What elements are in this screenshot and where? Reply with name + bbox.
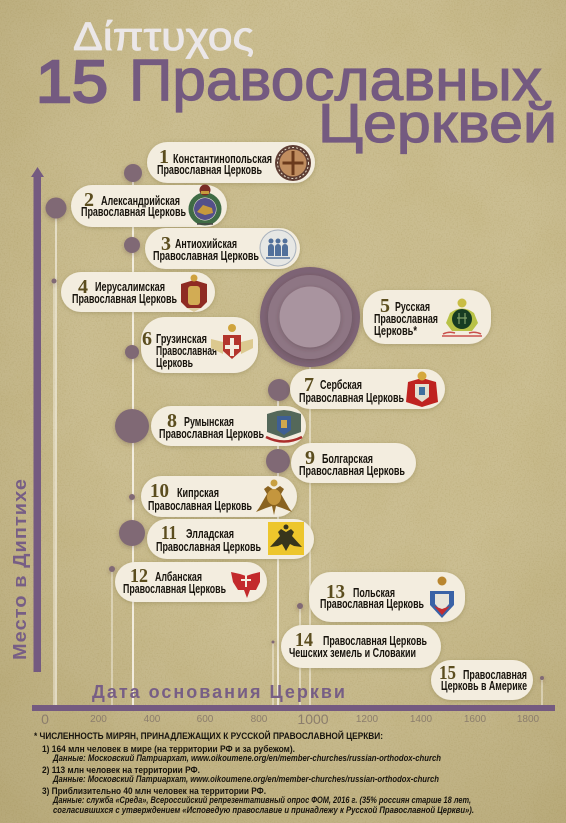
pill 14: Czech lands and Slovakia: 14 <box>295 629 313 651</box>
icon: Constantinople seal <box>275 145 311 181</box>
pill 12: Albania: 12 <box>130 565 148 587</box>
horizontal axis label: Дата основания Церкви <box>92 682 347 702</box>
icon: Georgian emblem <box>211 324 253 359</box>
timeline stems <box>54 173 542 705</box>
bubbles: church size markers <box>46 164 544 680</box>
pill 13: Poland: Польская <box>353 586 395 600</box>
pill 1: Constantinople <box>147 142 315 183</box>
pill 9: Bulgaria <box>291 443 416 483</box>
pill 4: Jerusalem: Православная Церковь <box>72 292 177 306</box>
pill 1: Constantinople: Православная Церковь <box>157 163 262 177</box>
icon: Jerusalem emblem <box>181 274 207 312</box>
icon: Romanian emblem <box>266 410 302 442</box>
axis year labels <box>41 711 540 727</box>
pill 6: Georgia: 6 <box>142 328 152 350</box>
icon: Polish emblem <box>430 576 454 618</box>
footnote: 3) Приблизительно 40 млн человек на территории РФ. <box>42 786 266 797</box>
pill 6: Georgia <box>141 317 258 373</box>
pill 6: Georgia: Православная <box>156 344 217 358</box>
footnote: Данные: Московский Патриархат, www.oikoumene.org/en/member-churches/russian-orthodox-church <box>52 753 441 764</box>
horizontal axis bar <box>32 705 555 711</box>
pill 11: Greece: 11 <box>161 522 177 544</box>
pill 3: Antioch <box>145 228 300 269</box>
icon: Russian emblem <box>442 298 482 336</box>
pill 7: Serbia: Сербская <box>320 378 362 392</box>
title <box>36 15 557 154</box>
pill 2: Alexandria: Православная Церковь <box>81 205 186 219</box>
pill 12: Albania: Албанская <box>155 570 202 584</box>
pill 11: Greece: Православная Церковь <box>156 540 261 554</box>
pill 5: Russia: 5 <box>380 295 390 317</box>
pill 5: Russia <box>363 290 491 344</box>
vertical axis label: Место в Диптихе <box>10 478 30 660</box>
axis year labels: 1800 <box>517 714 540 725</box>
axis year labels: 1000 <box>297 711 329 727</box>
pill 14: Czech lands and Slovakia: Чешских земель и Словакии <box>289 646 416 660</box>
pill 8: Romania: 8 <box>167 410 177 432</box>
pill 1: Constantinople: 1 <box>159 146 169 168</box>
pill 2: Alexandria: 2 <box>84 189 94 211</box>
axis year labels: 1200 <box>356 714 379 725</box>
icon: Greek yellow flag with eagle <box>268 522 304 555</box>
pill 13: Poland <box>309 572 465 622</box>
pill 1: Constantinople: Константинопольская <box>173 152 272 166</box>
pill 12: Albania <box>115 562 267 602</box>
title: line one: Православных <box>129 48 542 113</box>
pill 15: America <box>431 660 533 700</box>
icon: Antioch seal <box>260 230 296 266</box>
pill 8: Romania <box>151 406 306 446</box>
axis year labels: 1400 <box>410 714 433 725</box>
pill 15: America: 15 <box>439 662 456 684</box>
pill 2: Alexandria <box>71 184 227 227</box>
pill 15: America: Православная <box>463 668 527 682</box>
footnote: Данные: Московский Патриархат, www.oikoumene.org/en/member-churches/russian-orthodox-church <box>52 774 439 785</box>
pill 6: Georgia: Грузинская <box>156 332 207 346</box>
pill 11: Greece: Элладская <box>186 527 234 541</box>
pill 8: Romania: Румынская <box>184 415 234 429</box>
icon: Albanian red eagle <box>231 572 260 598</box>
pill 15: America: Церковь в Америке <box>441 679 527 693</box>
axis year labels: 400 <box>144 714 161 725</box>
pill 7: Serbia: 7 <box>304 374 314 396</box>
footnote: * ЧИСЛЕННОСТЬ МИРЯН, ПРИНАДЛЕЖАЩИХ К РУССКОЙ ПРАВОСЛАВНОЙ ЦЕРКВИ: <box>34 730 383 742</box>
pill 10: Cyprus <box>141 476 297 517</box>
footnote: согласившихся с утверждением «Исповедую православие и принадлежу к Русской Православной Церкви»). <box>53 805 474 816</box>
pill 3: Antioch: 3 <box>161 233 171 255</box>
pill 11: Greece <box>147 519 314 559</box>
title: number 15: 15 <box>36 49 108 115</box>
pill 12: Albania: Православная Церковь <box>123 582 226 596</box>
pill 13: Poland: Православная Церковь <box>320 597 424 611</box>
pill 4: Jerusalem: Иерусалимская <box>95 280 165 294</box>
pill 5: Russia: Церковь* <box>374 324 417 338</box>
pill 9: Bulgaria: Православная Церковь <box>299 464 405 478</box>
pill 9: Bulgaria: 9 <box>305 447 315 469</box>
footnote: 2) 113 млн человек на территории РФ. <box>42 765 200 776</box>
pill 2: Alexandria: Александрийская <box>101 194 180 208</box>
pill 9: Bulgaria: Болгарская <box>322 452 373 466</box>
axis year labels: 1600 <box>464 714 487 725</box>
icon: Serbian emblem <box>406 372 438 407</box>
axis year labels: 200 <box>90 714 107 725</box>
pill 4: Jerusalem <box>61 272 215 312</box>
pill 4: Jerusalem: 4 <box>78 276 88 298</box>
bubble: Russian church, three concentric circles <box>260 267 360 367</box>
title: line two: Церквей <box>318 92 557 154</box>
pill 5: Russia: Православная <box>374 312 438 326</box>
axis year labels: 600 <box>197 714 214 725</box>
pill 3: Antioch: Православная Церковь <box>153 249 259 263</box>
title: Greek word: Δίπτυχος <box>73 15 254 59</box>
pill 13: Poland: 13 <box>326 581 345 603</box>
pill 8: Romania: Православная Церковь <box>159 427 264 441</box>
vertical axis arrow <box>31 167 44 672</box>
pill 7: Serbia: Православная Церковь <box>299 391 404 405</box>
pill 3: Antioch: Антиохийская <box>175 237 237 251</box>
pill 7: Serbia <box>290 369 445 409</box>
pill 14: Czech lands and Slovakia <box>281 625 441 668</box>
pill 5: Russia: Русская <box>395 300 430 314</box>
axis year labels: 0 <box>41 711 49 727</box>
pill 10: Cyprus: Православная Церковь <box>148 499 252 513</box>
pill 10: Cyprus: Кипрская <box>177 486 219 500</box>
footnote: 1) 164 млн человек в мире (на территории РФ и за рубежом). <box>42 744 295 755</box>
pill 14: Czech lands and Slovakia: Православная Церковь <box>323 634 427 648</box>
axis year labels: 800 <box>251 714 268 725</box>
pill 10: Cyprus: 10 <box>150 480 169 502</box>
pill 6: Georgia: Церковь <box>156 356 193 370</box>
icon: Cyprus double-headed eagle <box>256 480 292 515</box>
icon: Alexandria emblem <box>191 184 219 224</box>
footnote <box>34 730 474 816</box>
